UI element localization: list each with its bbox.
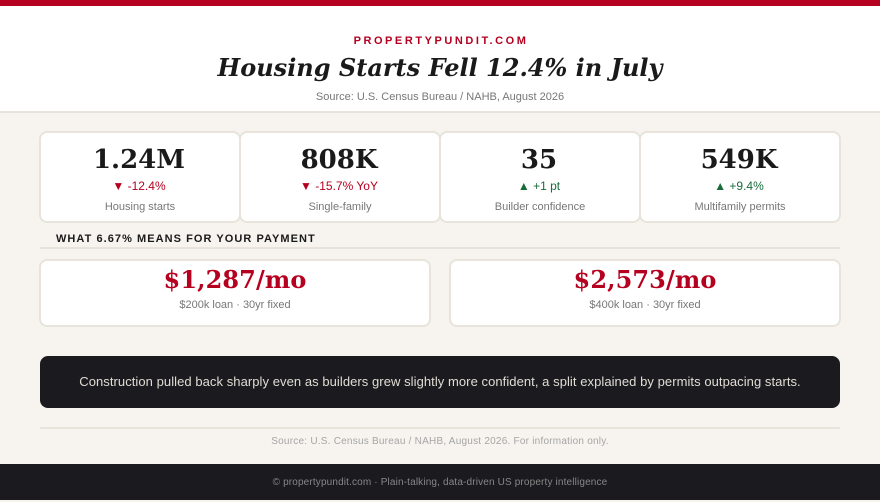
stat card: single-family: [239, 131, 441, 223]
loan terms: $200k loan · 30yr fixed: [179, 299, 291, 311]
footnote source: Source: U.S. Census Bureau / NAHB, August 2026. For information only.: [271, 436, 609, 447]
amount: $2,573/mo: [574, 265, 716, 294]
stat card: housing starts: [39, 131, 241, 223]
value: 35: [521, 145, 557, 175]
footer bar: © propertypundit.com · Plain-talking, data-driven US property intelligence: [273, 477, 607, 488]
stat card: multifamily permits: [639, 131, 841, 223]
footnote source: [40, 427, 840, 453]
label: Multifamily permits: [694, 201, 786, 213]
brand name: PROPERTYPUNDIT.COM: [354, 35, 528, 47]
payment card: $200k loan: [39, 259, 431, 327]
subtitle source: Source: U.S. Census Bureau / NAHB, August 2026: [316, 91, 564, 103]
value: 1.24M: [93, 145, 185, 175]
payment card: $400k loan: [449, 259, 841, 327]
label: Builder confidence: [495, 201, 585, 213]
callout: [40, 356, 840, 408]
value: 808K: [301, 145, 377, 175]
change: ▲ +1 pt: [518, 179, 560, 193]
change: ▲ +9.4%: [714, 179, 764, 193]
header: [0, 6, 880, 113]
stat card: builder confidence: [439, 131, 641, 223]
footer bar: [0, 464, 880, 500]
amount: $1,287/mo: [164, 265, 306, 294]
label: Single-family: [309, 201, 371, 213]
callout: Construction pulled back sharply even as builders grew slightly more confident, a split explained by permits outpacing starts.: [79, 374, 801, 389]
change: ▼ -12.4%: [112, 179, 166, 193]
change: ▼ -15.7% YoY: [300, 179, 378, 193]
loan terms: $400k loan · 30yr fixed: [589, 299, 701, 311]
section heading: payment: WHAT 6.67% MEANS FOR YOUR PAYMENT: [56, 233, 316, 245]
section heading: payment: [40, 231, 840, 249]
title: Housing Starts Fell 12.4% in July: [218, 53, 662, 82]
top accent bar: [0, 0, 880, 6]
value: 549K: [701, 145, 777, 175]
label: Housing starts: [105, 201, 175, 213]
